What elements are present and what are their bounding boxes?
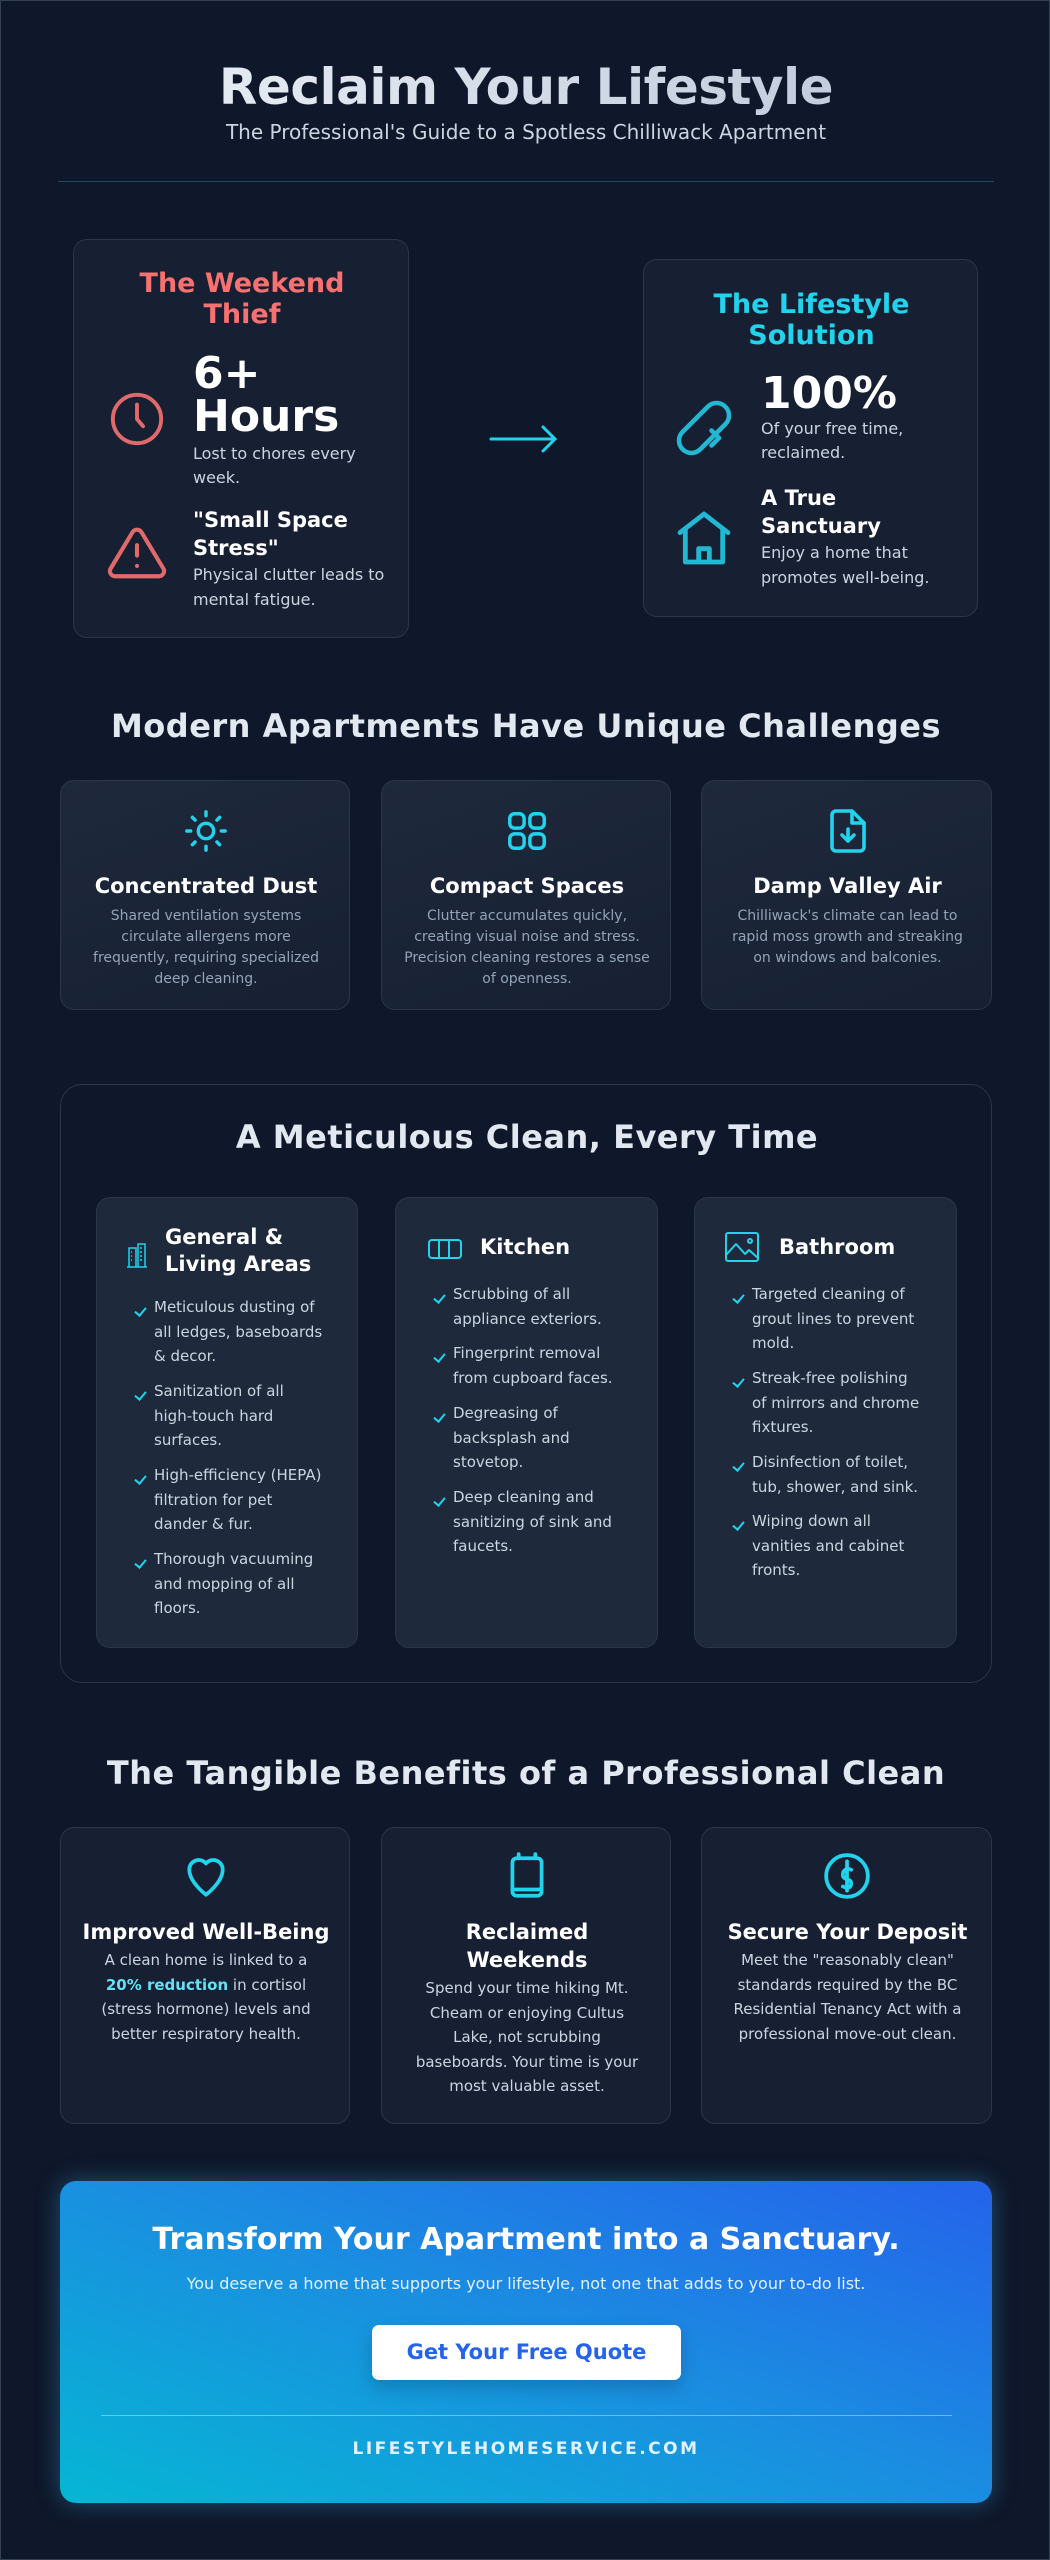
text: weekends: Spend your time hiking Mt. bbox=[425, 1979, 629, 1997]
stat: 100% bbox=[761, 368, 903, 462]
text: deposit: Residential Tenancy Act with a bbox=[733, 2000, 962, 2018]
text: dust: deep cleaning. bbox=[154, 971, 258, 987]
text: well-being: better respiratory health. bbox=[111, 2024, 301, 2042]
heading: weekend thief bbox=[140, 268, 344, 330]
subtitle: The Professional's Guide to a Spotless Chilliwack Apartment bbox=[226, 120, 826, 144]
heading: lifestyle solution bbox=[713, 289, 910, 351]
card: bathroom bbox=[694, 1197, 957, 1648]
checklist: kitchen: backsplash and bbox=[453, 1428, 570, 1446]
text: deposit: professional move-out clean. bbox=[739, 2024, 956, 2042]
stat: true sanctuary: Sanctuary bbox=[761, 514, 881, 538]
checklist: kitchen: Degreasing of bbox=[453, 1404, 558, 1422]
icon: house bbox=[678, 512, 730, 564]
text: compact: Precision cleaning restores a sense bbox=[404, 950, 650, 966]
text: dust: Shared ventilation systems bbox=[111, 908, 301, 924]
panel: well-being bbox=[60, 1827, 350, 2124]
stat: small space stress: mental fatigue. bbox=[193, 590, 316, 609]
text: well-being: 20% reduction in cortisol bbox=[106, 1976, 306, 1994]
text: damp: Damp Valley Air bbox=[753, 874, 942, 898]
checklist: general bbox=[134, 1298, 322, 1617]
checklist: general: dander & fur. bbox=[154, 1515, 253, 1533]
text: weekends: baseboards. Your time is your bbox=[416, 2052, 638, 2070]
panel: reclaimed weekends bbox=[381, 1827, 671, 2124]
panel: damp valley air bbox=[701, 780, 992, 1010]
text: damp bbox=[732, 874, 963, 966]
checklist: kitchen: Deep cleaning and bbox=[453, 1488, 594, 1506]
heading: kitchen: Kitchen bbox=[480, 1235, 570, 1259]
checklist: general: & decor. bbox=[154, 1347, 216, 1365]
stat: true sanctuary: promotes well-being. bbox=[761, 568, 930, 587]
text: weekends bbox=[416, 1920, 638, 2095]
checklist: general: Meticulous dusting of bbox=[154, 1298, 315, 1316]
checklist: bathroom: Streak-free polishing bbox=[752, 1369, 908, 1387]
text: dust: Concentrated Dust bbox=[95, 874, 317, 898]
panel: concentrated dust bbox=[60, 780, 350, 1010]
text: dust bbox=[93, 874, 319, 987]
heading: general bbox=[165, 1225, 311, 1276]
checklist: bathroom: tub, shower, and sink. bbox=[752, 1478, 918, 1496]
text: weekends: Reclaimed bbox=[466, 1920, 588, 1944]
button: Get Your Free Quote bbox=[407, 2340, 646, 2364]
heading: meticulous: A Meticulous Clean, Every Time bbox=[236, 1118, 818, 1156]
footer url: LIFESTYLEHOMESERVICE.COM bbox=[352, 2439, 700, 2459]
checklist: bathroom: fixtures. bbox=[752, 1418, 813, 1436]
text: damp: on windows and balconies. bbox=[753, 950, 942, 966]
heading: general: General & bbox=[165, 1225, 283, 1249]
heading: challenges: Modern Apartments Have Unique Challenges bbox=[111, 707, 941, 745]
panel: compact spaces bbox=[381, 780, 671, 1010]
panel: call to action bbox=[60, 2181, 992, 2503]
heading: general: Living Areas bbox=[165, 1252, 311, 1276]
checklist: general: surfaces. bbox=[154, 1431, 222, 1449]
checklist: general: Sanitization of all bbox=[154, 1382, 284, 1400]
stat: 100%: Of your free time, bbox=[761, 419, 903, 438]
text: compact: of openness. bbox=[482, 971, 572, 987]
cta heading: Transform Your Apartment into a Sanctuary. bbox=[152, 2222, 900, 2257]
button bbox=[372, 2325, 681, 2380]
stat: small space stress: "Small Space bbox=[193, 508, 348, 532]
stat: true sanctuary bbox=[761, 486, 930, 587]
icon: grid bbox=[508, 812, 546, 850]
stat: 100%: reclaimed. bbox=[761, 443, 845, 462]
text: dust: circulate allergens more bbox=[121, 929, 291, 945]
text: well-being bbox=[82, 1920, 330, 2042]
card: kitchen bbox=[395, 1197, 658, 1648]
checklist: general: all ledges, baseboards bbox=[154, 1322, 322, 1340]
stat: 6+ hours: week. bbox=[193, 468, 240, 487]
checklist: bathroom: Disinfection of toilet, bbox=[752, 1453, 908, 1471]
stat: 6+ hours: Lost to chores every bbox=[193, 444, 356, 463]
checklist: general: floors. bbox=[154, 1599, 201, 1617]
checklist: general: high-touch hard bbox=[154, 1406, 273, 1424]
icon: heart bbox=[187, 1858, 225, 1897]
text: weekends: Weekends bbox=[466, 1948, 588, 1972]
text: compact bbox=[404, 874, 650, 987]
checklist: bathroom: mold. bbox=[752, 1334, 794, 1352]
checklist: bathroom: grout lines to prevent bbox=[752, 1310, 914, 1328]
text: well-being: (stress hormone) levels and bbox=[101, 2000, 311, 2018]
text: damp: rapid moss growth and streaking bbox=[732, 929, 963, 945]
heading: benefits: The Tangible Benefits of a Professional Clean bbox=[107, 1754, 945, 1792]
text: compact: Clutter accumulates quickly, bbox=[427, 908, 627, 924]
text: dust: frequently, requiring specialized bbox=[93, 950, 319, 966]
panel: secure deposit bbox=[701, 1827, 992, 2124]
title: Reclaim Your Lifestyle bbox=[219, 58, 833, 116]
text: compact: Compact Spaces bbox=[430, 874, 624, 898]
icon: coin bbox=[824, 1853, 870, 1899]
text: well-being: Improved Well-Being bbox=[82, 1920, 330, 1944]
checklist: kitchen: Fingerprint removal bbox=[453, 1344, 600, 1362]
heading: weekend thief: The Weekend bbox=[140, 268, 344, 299]
text: weekends: most valuable asset. bbox=[449, 2077, 605, 2095]
heading: lifestyle solution: The Lifestyle bbox=[713, 289, 910, 320]
icon: sun bbox=[185, 810, 227, 852]
title bbox=[1, 56, 1050, 118]
icon: warning bbox=[108, 528, 166, 578]
checklist: kitchen: stovetop. bbox=[453, 1453, 523, 1471]
card: general bbox=[96, 1197, 358, 1648]
panel: weekend thief bbox=[73, 239, 409, 638]
checklist: kitchen: faucets. bbox=[453, 1537, 513, 1555]
stat: small space stress: Physical clutter leads to bbox=[193, 565, 384, 584]
stat: 6+ hours: 6+ bbox=[193, 348, 260, 399]
stat: true sanctuary: Enjoy a home that bbox=[761, 543, 908, 562]
text: weekends: Cheam or enjoying Cultus bbox=[430, 2004, 624, 2022]
icon: calendar bbox=[510, 1852, 544, 1898]
text: weekends: Lake, not scrubbing bbox=[453, 2028, 601, 2046]
panel: lifestyle solution bbox=[643, 259, 978, 617]
checklist: general: and mopping of all bbox=[154, 1574, 295, 1592]
checklist: kitchen: sanitizing of sink and bbox=[453, 1512, 612, 1530]
checklist: kitchen: from cupboard faces. bbox=[453, 1368, 613, 1386]
stat: 6+ hours: Hours bbox=[193, 391, 339, 442]
icon: image bbox=[725, 1232, 759, 1262]
arrow bbox=[490, 425, 557, 453]
checklist: bathroom bbox=[732, 1285, 919, 1579]
panel: meticulous clean bbox=[60, 1084, 992, 1683]
heading: weekend thief: Thief bbox=[204, 299, 280, 330]
icon: clock bbox=[110, 392, 164, 446]
stat: true sanctuary: A True bbox=[761, 486, 836, 510]
icon: file download bbox=[830, 809, 866, 853]
checklist: general: Thorough vacuuming bbox=[154, 1550, 313, 1568]
checklist: bathroom: fronts. bbox=[752, 1561, 800, 1579]
text: well-being: A clean home is linked to a bbox=[105, 1951, 307, 1969]
checklist: bathroom: of mirrors and chrome bbox=[752, 1394, 919, 1412]
text: deposit: standards required by the BC bbox=[738, 1976, 957, 1994]
checklist: kitchen: Scrubbing of all bbox=[453, 1285, 570, 1303]
text: damp: Chilliwack's climate can lead to bbox=[738, 908, 957, 924]
heading: bathroom: Bathroom bbox=[779, 1235, 895, 1259]
text: deposit: Secure Your Deposit bbox=[728, 1920, 967, 1944]
heading: lifestyle solution: Solution bbox=[748, 320, 875, 351]
cta subtitle: You deserve a home that supports your lifestyle, not one that adds to your to-do list. bbox=[187, 2274, 865, 2293]
stat: small space stress: Stress" bbox=[193, 536, 279, 560]
stat: 100%: 100% bbox=[761, 368, 897, 419]
checklist: general: High-efficiency (HEPA) bbox=[154, 1466, 321, 1484]
stat: 6+ hours bbox=[193, 348, 356, 487]
icon: kitchen bbox=[428, 1239, 462, 1259]
text: deposit bbox=[728, 1920, 967, 2042]
checklist: kitchen bbox=[433, 1285, 613, 1555]
text: deposit: Meet the "reasonably clean" bbox=[741, 1951, 954, 1969]
checklist: general: filtration for pet bbox=[154, 1490, 272, 1508]
checklist: bathroom: vanities and cabinet bbox=[752, 1536, 904, 1554]
text: compact: creating visual noise and stress. bbox=[414, 929, 640, 945]
checklist: bathroom: Wiping down all bbox=[752, 1512, 871, 1530]
checklist: bathroom: Targeted cleaning of bbox=[752, 1285, 905, 1303]
checklist: kitchen: appliance exteriors. bbox=[453, 1310, 602, 1328]
stat: small space stress bbox=[193, 508, 384, 609]
icon: building bbox=[127, 1243, 147, 1268]
icon: pill bbox=[676, 400, 732, 456]
